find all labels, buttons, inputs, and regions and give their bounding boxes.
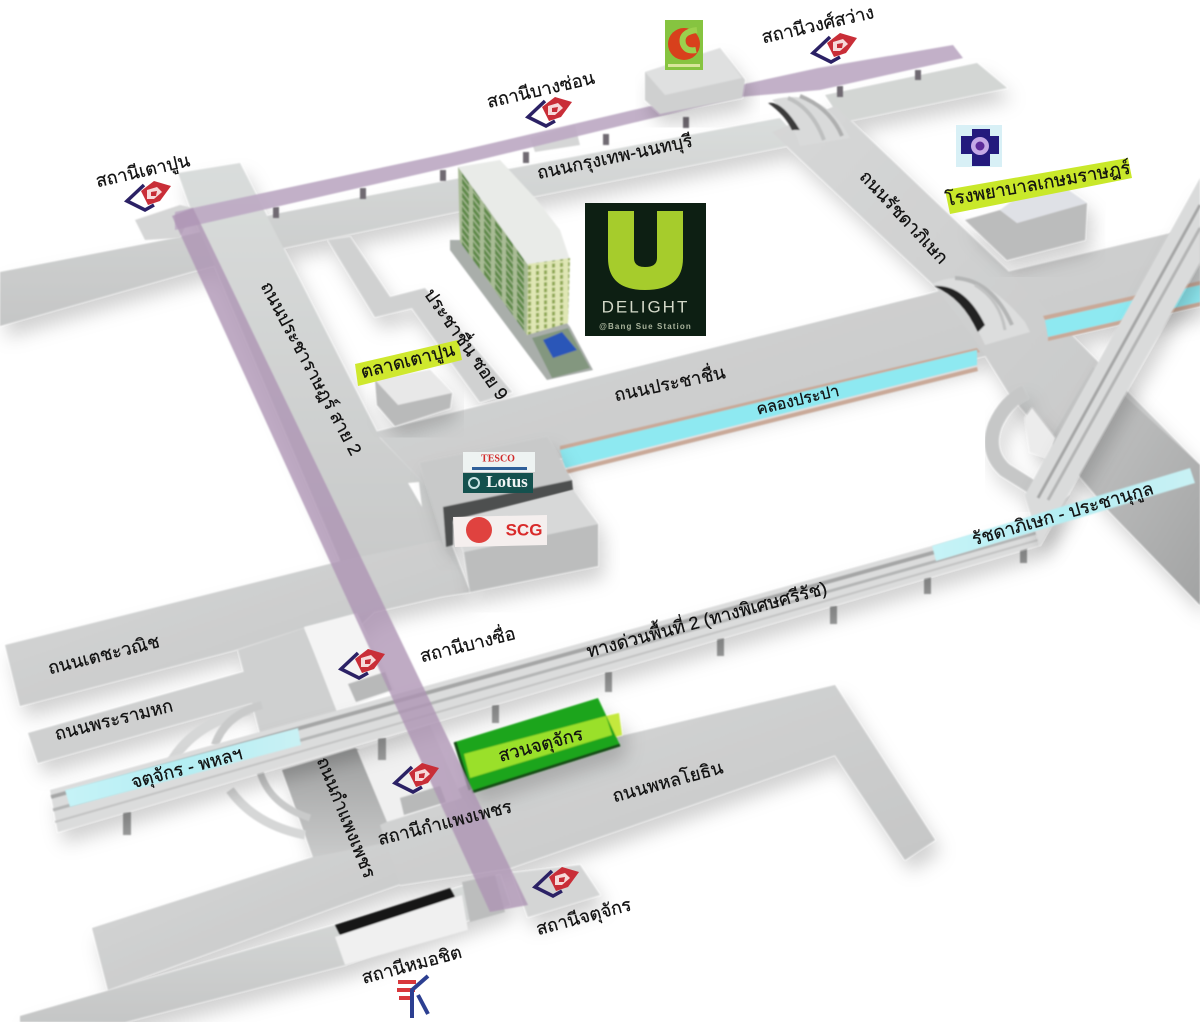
canal: Khlong Prapa [560,281,1200,474]
building: hospital [965,175,1087,260]
icon: hospital cross [956,125,1002,167]
label: Techa Wanit road: ถนนเตชะวณิช [46,631,162,678]
icon: SCG logo: SCG [506,520,542,539]
building: Tesco Lotus [420,437,573,548]
long facade [458,167,528,335]
road: Phahon Yothin [380,685,935,885]
label: Tao Poon station: สถานีเตาปูน [94,150,192,192]
label: Ratchadaphisek road: ถนนรัชดาภิเษก [856,166,952,268]
loop ramp [992,392,1055,492]
label: Khlong Prapa: คลองประปา [755,383,841,419]
icon: MRT Tao Poon [127,181,171,210]
MRT purple line: vertical [172,208,528,912]
label: Bang Sue station: สถานีบางซื่อ [417,620,517,666]
road: Krung Thep-Nonthaburi [0,118,802,326]
road: Pracharat Sai 2 [178,163,470,640]
pool area [532,328,590,378]
white notch next to Tesco [408,482,422,507]
icon: Tesco Lotus logo: TESCO [481,453,515,464]
icon: MRT Bang Son [528,97,572,126]
label: Phahon Yothin road: ถนนพหลโยธิน [610,756,725,806]
expressway label band: right [932,468,1195,561]
road: Prachachuen [375,226,1200,490]
label: Mo Chit station: สถานีหมอชิต [359,942,464,988]
icon: MRT Kamphaeng Phet [395,763,439,792]
label: Kamphaeng Phet road: ถนนกำแพงเพชร [313,754,380,881]
end facade [527,258,570,335]
label highlight: hospital [945,158,1132,214]
icon: MRT Chatuchak [535,867,579,896]
label: Bang Son station: สถานีบางซ่อน [485,68,597,112]
label: Tao Poon market: ตลาดเตาปูน [359,339,457,383]
logo: U Delight [585,203,706,336]
building: market Tao Poon [375,370,452,426]
expressway piers [123,547,1027,835]
label: Chatuchak Park: สวนจตุจักร [496,724,586,767]
elevated rail: upper purple line [175,45,963,230]
elevated ramps left [165,705,310,835]
label: Prachachuen Soi 9: ประชาชื่น ซอย 9 [420,283,514,404]
label: Kamphaeng Phet station: สถานีกำแพงเพชร [376,796,514,849]
roof [458,160,570,265]
tunnel: Ratchada south underpass [932,278,1030,345]
label: Pracharat Sai 2 road: ถนนประชาราษฎร์ สาย 2 [257,278,365,459]
platform: Bang Son station [530,125,580,152]
podium [450,240,593,380]
road: Ratchadaphisek south-east [1050,367,1200,605]
label: Wong Sawang station: สถานีวงศ์สว่าง [760,2,876,47]
label: Ratchadaphisek - Prachanukul: รัชดาภิเษก - ประชานุกูล [970,478,1156,550]
icon: BTS Mo Chit [397,976,428,1018]
label: Krung Thep-Nonthaburi road: ถนนกรุงเทพ-นนทบุรี [535,130,695,184]
station details [335,672,505,965]
label: Prachachuen road: ถนนประชาชื่น [612,359,727,405]
road: Ratchada north [825,63,1007,122]
expressway: Si Rat elevated [50,495,1070,832]
road: Kamphaeng Phet north [238,628,345,740]
label: Expressway zone 2: ทางด่วนพื้นที่ 2 (ทางพิเศษศรีรัช) [584,575,829,662]
label: Chatuchak - Phahon: จตุจักร - พหลฯ [129,743,245,793]
label highlight: market [355,340,462,386]
logo: U Delight: @Bang Sue Station [599,322,692,331]
icon: MRT Wong Sawang [813,33,857,62]
platform: Chatuchak station [512,865,600,917]
label: Chatuchak station: สถานีจตุจักร [534,894,634,940]
label: Rama 6 road: ถนนพระรามหก [53,695,175,744]
platform: Bang Sue station [304,613,395,712]
expressway label band: left [65,728,301,807]
icon: MRT Bang Sue [341,649,385,678]
park: Chatuchak Park [455,698,622,792]
pool [543,332,577,358]
building: SCG [453,490,598,592]
icon: Big C logo [665,20,703,70]
tunnel: Ratchada north underpass [768,96,850,146]
icon: Tesco Lotus logo [463,452,535,493]
label: Kasemrad Hospital: โรงพยาบาลเกษมราษฎร์ [944,157,1132,210]
road: Soi Prachachuen 9 [328,237,512,402]
icon: SCG logo [453,515,547,547]
road: Rama 6 [28,670,262,763]
building: Big C [645,48,745,114]
icon: Tesco Lotus logo: Lotus [486,472,528,491]
platform: Tao Poon station [135,205,193,240]
road: Ratchadaphisek [772,106,1200,605]
elevated rail piers [273,70,921,218]
road: Techa Wanit [5,540,470,706]
road: Kamphaeng Phet south [282,748,470,880]
logo: U Delight: DELIGHT [602,297,689,316]
platform: Kamphaeng Phet station [357,725,462,822]
building: U Delight tower [450,160,593,380]
expressway: diagonal to north-east [1025,178,1200,545]
road: bottom block [92,840,440,990]
road: bottom rail band [20,875,510,1022]
